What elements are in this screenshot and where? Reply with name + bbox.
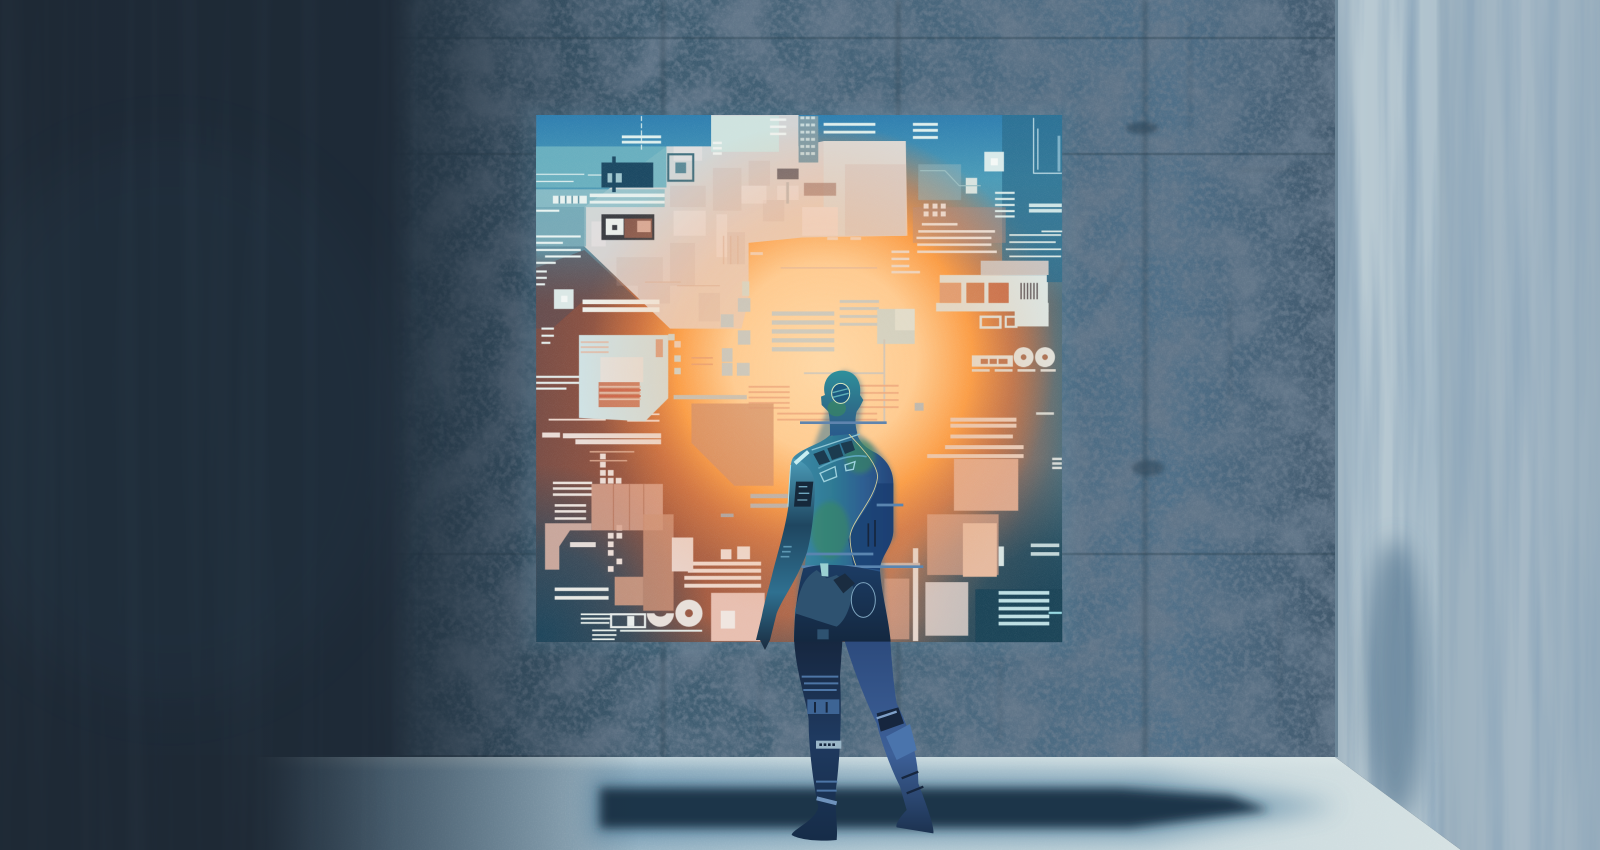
pink blocks lower right [872, 459, 1059, 641]
left darkness vertical streaks [0, 0, 418, 850]
dark bars lower right [975, 589, 1062, 642]
right side wall [1335, 0, 1600, 850]
pale circuit mass [536, 115, 1062, 642]
warm light overlay [536, 115, 1062, 642]
panel glow on wall [525, 108, 1073, 650]
small pale square left [554, 289, 574, 309]
hip plates [794, 563, 891, 642]
big pale chip left [579, 334, 681, 421]
right band stripes [927, 420, 1024, 456]
leg tech plates [802, 677, 923, 803]
disc pair bottom left [611, 600, 702, 627]
hatched strip [553, 196, 587, 204]
arm [756, 452, 815, 650]
panel base gradient [536, 115, 1062, 642]
back leg [843, 637, 933, 833]
left blue haze [0, 140, 400, 700]
glitch bar across lower back [802, 505, 923, 567]
glowing circuit panel [536, 114, 1063, 642]
yellow spinal wire [832, 428, 878, 580]
panel grain [536, 115, 1062, 642]
green spine glow [811, 502, 849, 558]
right side circuit strip [936, 275, 1049, 327]
salmon lines center [749, 386, 899, 420]
pink blocks lower left [545, 484, 765, 641]
left darkness over wall [0, 0, 650, 757]
concrete back wall [402, 0, 1335, 757]
left darkness over floor [0, 755, 640, 850]
disc pair right [972, 347, 1056, 370]
figure blue halo [797, 371, 895, 637]
lavender bars [750, 494, 788, 498]
android figure seen from behind [756, 371, 933, 841]
floor [275, 757, 1461, 850]
stripes upper right [891, 224, 997, 272]
darker lumbar panel [848, 483, 893, 570]
shoulder plates [812, 434, 867, 482]
pale chip squares left column [600, 454, 622, 572]
pale stripes and traces [622, 124, 938, 142]
torso [793, 428, 923, 640]
dark chip top left [601, 154, 693, 192]
front leg [792, 637, 843, 841]
head [800, 371, 887, 436]
octagon chip [691, 404, 774, 486]
floor shadow halo [590, 775, 1340, 840]
head implant ring [832, 383, 850, 403]
hips and legs group [792, 637, 933, 841]
mass low-contrast blocks [616, 161, 770, 300]
top grid block [713, 116, 836, 204]
center stripes [721, 298, 879, 376]
floor shadow of the panel [600, 788, 1270, 828]
brown chip [601, 214, 654, 240]
white square and bars top right [920, 118, 1062, 256]
